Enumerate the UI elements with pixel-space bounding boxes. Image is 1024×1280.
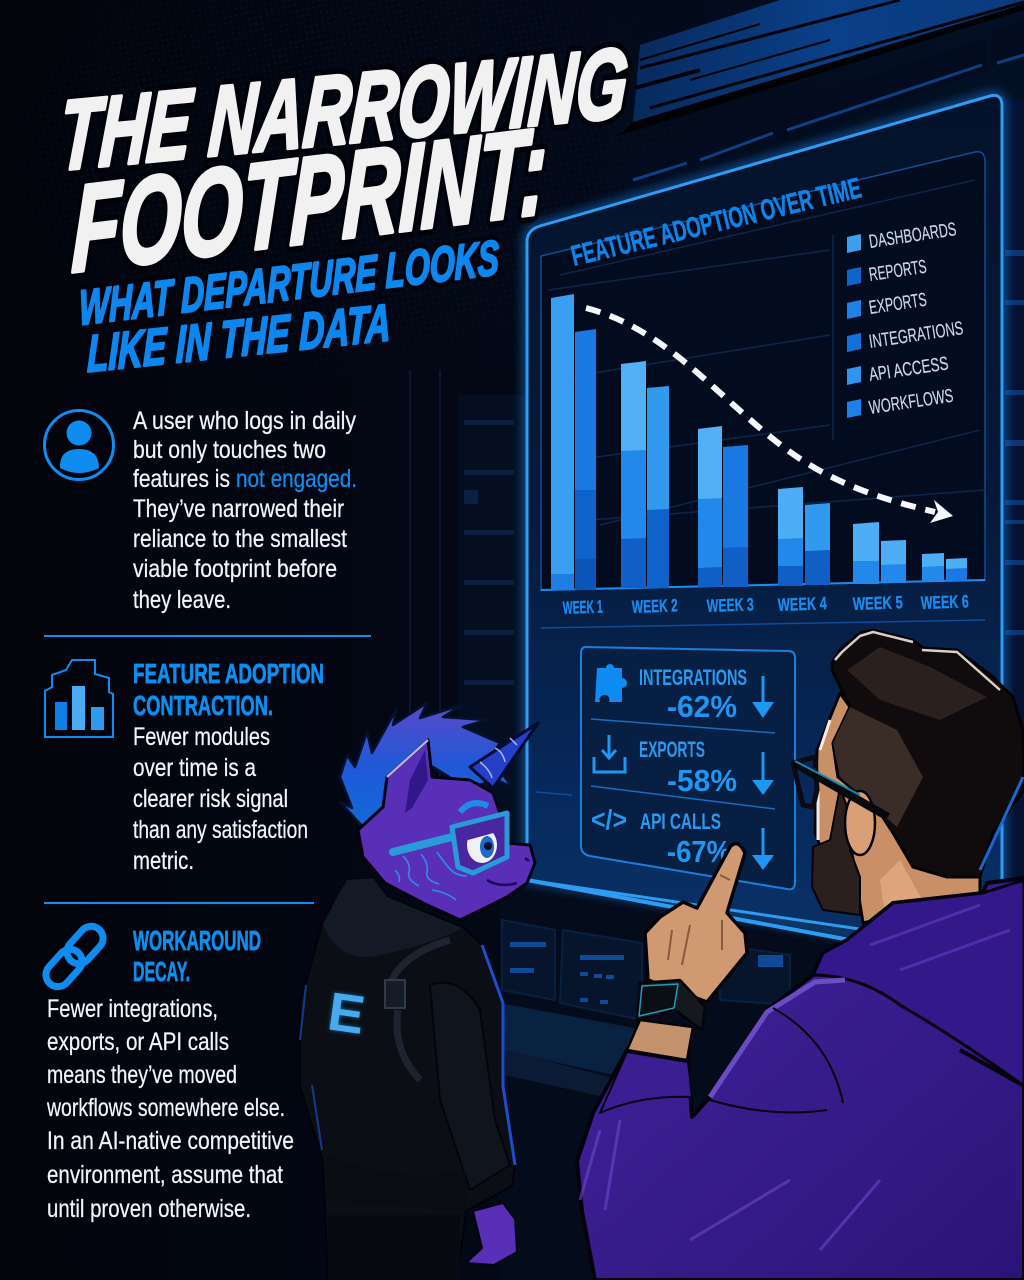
heading (133, 658, 324, 721)
body text: metric. (133, 847, 194, 875)
legend: WORKFLOWS (868, 386, 955, 419)
section: not engaged (44, 407, 357, 614)
body text: clearer risk signal (133, 785, 288, 813)
metric: exports: -58% (667, 763, 737, 798)
metric: api calls: API CALLS (640, 809, 721, 834)
mascot head (358, 740, 535, 920)
metric: integrations: INTEGRATIONS (639, 665, 747, 690)
character: unicorn mascot (300, 703, 538, 1280)
legend: API ACCESS (868, 353, 950, 386)
mascot horn (470, 723, 538, 788)
body text: means they’ve moved (47, 1061, 237, 1089)
body text: workflows somewhere else. (46, 1094, 285, 1122)
bar chart (541, 294, 985, 590)
title outline: FOOTPRINT: (70, 102, 549, 299)
mascot glasses (393, 813, 507, 873)
metric: exports: EXPORTS (639, 737, 705, 762)
screen glow (527, 96, 1002, 960)
ceiling panels (627, 20, 1024, 195)
heading: FEATURE ADOPTION (133, 658, 324, 689)
title (57, 27, 631, 384)
subtitle line 2: LIKE IN THE DATA (87, 294, 391, 384)
ceiling light beam (633, 0, 1024, 122)
man glasses (793, 757, 888, 817)
body text: Fewer integrations, (47, 995, 218, 1023)
character: man pointing (577, 630, 1024, 1280)
title outline: THE NARROWING (57, 27, 631, 191)
week 6 bars (922, 553, 967, 582)
E logo: E (324, 981, 368, 1046)
legend: DASHBOARDS (868, 219, 958, 253)
body text: but only touches two (133, 436, 326, 464)
week axis labels: WEEK 5 (852, 592, 903, 614)
heading: DECAY. (133, 956, 190, 987)
body text: they leave. (133, 586, 231, 614)
heading: WORKAROUND (133, 925, 261, 956)
body text: until proven otherwise. (47, 1195, 251, 1223)
week axis labels: WEEK 2 (631, 595, 678, 617)
heading (133, 925, 261, 987)
body text: than any satisfaction (133, 816, 308, 844)
mascot hoodie body (300, 878, 515, 1280)
metric: integrations (595, 664, 774, 724)
legend: EXPORTS (868, 290, 928, 319)
body text: exports, or API calls (47, 1028, 229, 1056)
title outline (57, 27, 631, 336)
body text: features is (133, 465, 230, 493)
body text (46, 995, 294, 1223)
metric: api calls (591, 804, 774, 870)
body text: environment, assume that (47, 1161, 283, 1189)
legend (847, 219, 965, 419)
title line 2: FOOTPRINT: (70, 102, 549, 299)
icon: chain link (41, 921, 108, 992)
week axis labels (562, 591, 969, 618)
mascot mouth (487, 858, 529, 885)
metrics card (581, 647, 795, 889)
metric: exports (594, 735, 774, 798)
man hoodie (577, 878, 1024, 1280)
subtitle line 1: WHAT DEPARTURE LOOKS (79, 230, 499, 336)
title outline: WHAT DEPARTURE LOOKS (79, 230, 499, 336)
body text: not engaged. (236, 465, 357, 493)
week 5 bars (853, 522, 906, 584)
man beard (812, 787, 860, 915)
body text (133, 407, 357, 614)
metric: integrations: -62% (667, 689, 737, 724)
legend: INTEGRATIONS (868, 318, 965, 353)
E logo glow: E (324, 981, 368, 1046)
week 3 bars (698, 426, 748, 587)
metric: api calls: -67% (667, 834, 731, 869)
dashed trend arrow (586, 308, 953, 523)
body text: They’ve narrowed their (133, 495, 344, 523)
legend: REPORTS (868, 257, 928, 286)
week 2 bars (621, 361, 669, 588)
week axis labels: WEEK 3 (706, 594, 754, 616)
mascot mane (340, 703, 512, 827)
body text (133, 723, 308, 875)
console below screen (500, 880, 860, 1280)
server racks (392, 100, 1024, 900)
title line 1: THE NARROWING (57, 27, 631, 191)
man arm and hand (627, 844, 747, 1060)
icon: shrinking bar chart (45, 660, 113, 737)
body text: over time is a (133, 754, 256, 782)
screen panel (527, 95, 1002, 950)
chart title: FEATURE ADOPTION OVER TIME (568, 172, 864, 273)
mascot hand (466, 1203, 517, 1265)
metric: api calls: </> (591, 804, 627, 835)
week axis labels: WEEK 6 (920, 591, 969, 613)
body text: reliance to the smallest (133, 525, 347, 553)
week 4 bars (778, 487, 830, 586)
man hair (832, 630, 1024, 877)
man ear (845, 791, 875, 855)
man skin: neck and face (815, 693, 980, 923)
smartwatch (637, 980, 705, 1030)
body text: In an AI-native competitive (47, 1127, 294, 1155)
icon: user (44, 410, 114, 480)
week 1 bars (551, 294, 596, 590)
section: workaround decay (41, 921, 294, 1223)
week axis labels: WEEK 1 (562, 597, 603, 618)
section: feature adoption contraction (45, 658, 324, 875)
body text: A user who logs in daily (133, 407, 356, 435)
dashboard screen (527, 95, 1002, 960)
heading: CONTRACTION. (133, 690, 273, 721)
body text: Fewer modules (133, 723, 270, 751)
body text: viable footprint before (133, 555, 337, 583)
week axis labels: WEEK 4 (777, 593, 827, 615)
